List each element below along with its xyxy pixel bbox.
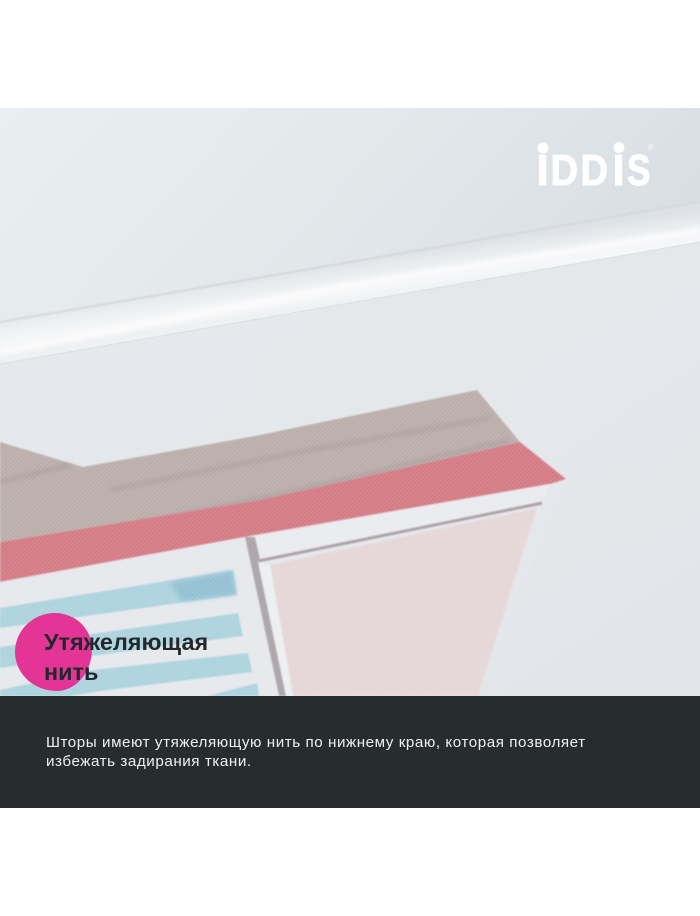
white window frame (0, 537, 285, 696)
lower fabric background (0, 242, 700, 696)
upper fabric background (0, 108, 700, 368)
roof: pink fascia (0, 442, 566, 582)
logo: IDDIS (536, 142, 654, 192)
callout heading: нить (44, 659, 98, 685)
white post edge (258, 562, 293, 696)
panel: curtain photograph (0, 108, 700, 696)
grey post (245, 537, 291, 696)
panel: dark caption band (0, 696, 700, 808)
blue shutter slats (0, 570, 259, 696)
eave shadow line (258, 503, 542, 561)
dark blue watercolor patch (170, 571, 236, 601)
white eave strip (245, 484, 550, 560)
pink wall (270, 508, 537, 696)
caption text: Шторы имеют утяжеляющую нить по нижнему краю, которая позволяет (46, 734, 586, 751)
fabric weave texture (0, 390, 566, 696)
pink circle marker (15, 613, 92, 691)
roof: brown slope (0, 390, 520, 542)
callout heading: Утяжеляющая (44, 629, 208, 655)
callout heading (44, 629, 208, 685)
logo: IDDIS: ® (648, 143, 654, 152)
caption text (46, 734, 586, 770)
caption text: избежать задирания ткани. (46, 753, 252, 770)
callout: weighted thread label (15, 613, 208, 691)
roof: darker streaks (0, 418, 510, 525)
weighted hem fold (0, 202, 700, 364)
illustration: house on the curtain (0, 390, 566, 696)
